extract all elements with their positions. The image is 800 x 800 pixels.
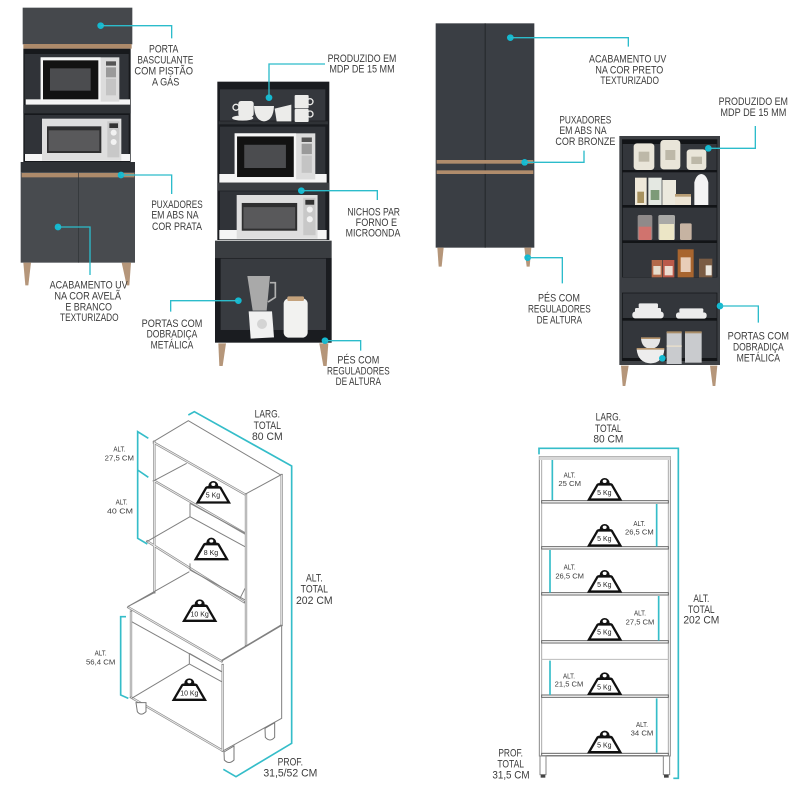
open shelving structure (619, 136, 720, 365)
legs (437, 248, 531, 267)
label: largura: TOTAL (254, 420, 281, 432)
label: alt 40: 40 CM (107, 506, 133, 515)
label: alt 27,5: ALT. (113, 445, 125, 454)
label: alt 21,5: ALT. (563, 671, 575, 680)
feet (540, 756, 670, 778)
callout: MDP: MDP DE 15 MM (720, 107, 786, 119)
callout: portas: PORTAS COM (728, 330, 789, 342)
microwave silver door (237, 195, 318, 239)
microwave black door (41, 57, 119, 102)
bronze handle strip top (23, 44, 132, 49)
weight shelf 6 (587, 731, 622, 753)
teal dimension lines (121, 412, 292, 777)
callout: portas: DOBRADIÇA (147, 329, 198, 341)
callout: acabamento preto: TEXTURIZADO (600, 75, 659, 87)
legs (218, 343, 328, 366)
label: alt 25: 25 CM (558, 479, 581, 488)
weight shelf 5: 5 Kg (597, 685, 612, 692)
panel: front dimension drawing (492, 412, 719, 781)
callout: acabamento avelã (50, 224, 128, 324)
label: alt 56,4 (86, 649, 115, 667)
callout: acabamento preto: NA COR PRETO (595, 64, 663, 76)
label: altura total: 202 CM (296, 595, 333, 607)
callout: acabamento avelã: NA COR AVELÃ (54, 289, 122, 302)
label: alt 25 (558, 470, 581, 488)
label: largura (593, 412, 623, 446)
label: profundidade: 31,5/52 CM (263, 767, 317, 779)
callout: puxadores bronze: COR BRONZE (555, 136, 615, 148)
legs (621, 366, 717, 386)
callout: nichos: FORNO E (356, 217, 397, 229)
callout: porta basculante (97, 22, 193, 89)
furniture feet (136, 703, 275, 762)
label: altura total: ALT. (306, 572, 323, 584)
callout: portas: PORTAS COM (142, 318, 202, 330)
label: alt 26,5 left: ALT. (564, 563, 576, 572)
microwave silver door (42, 119, 121, 161)
label: profundidade (263, 756, 317, 779)
callout: puxadores prata (118, 172, 203, 233)
label: alt 40: ALT. (116, 498, 128, 507)
legs (23, 263, 131, 285)
bowls and containers (637, 331, 702, 364)
callout: puxadores bronze: PUXADORES (559, 114, 611, 126)
label: profundidade: 31,5 CM (492, 769, 530, 781)
callout: MDP: MDP DE 15 MM (329, 64, 395, 76)
lower body (215, 241, 332, 343)
label: alt 34 (631, 720, 653, 737)
weight 8 Kg: 8 Kg (204, 550, 218, 557)
label: altura total: 202 CM (683, 615, 719, 627)
weight 8 Kg (194, 538, 229, 560)
label: alt 21,5: 21,5 CM (555, 680, 583, 689)
label: altura total (683, 593, 719, 627)
weight 10 Kg upper: 10 Kg (191, 611, 209, 618)
label: profundidade: PROF. (498, 748, 523, 760)
callout: pés (322, 337, 390, 388)
callout: pés: PÉS COM (337, 354, 379, 367)
callout: puxadores prata: EM ABS NA (151, 210, 199, 222)
callout: pés: REGULADORES (528, 303, 591, 315)
label: alt 26,5 right: ALT. (633, 519, 645, 528)
boxes and bottle (635, 174, 708, 205)
callout: MDP: PRODUZIDO EM (719, 96, 788, 108)
label: altura total (296, 572, 333, 607)
plates (632, 303, 707, 319)
label: altura total: TOTAL (688, 604, 715, 616)
label: alt 40 (107, 498, 133, 515)
callout: acabamento preto (507, 34, 667, 87)
blender (247, 276, 275, 339)
label: alt 34: ALT. (636, 720, 648, 729)
weight 5 Kg: 5 Kg (206, 493, 220, 500)
panel: open cabinet with appliances (142, 53, 401, 388)
callout: portas (717, 303, 789, 364)
upper door (23, 8, 132, 44)
label: alt 56,4: ALT. (95, 649, 107, 658)
label: alt 21,5 (555, 671, 583, 689)
callout: pés: REGULADORES (327, 365, 390, 377)
callout: puxadores prata: COR PRATA (152, 221, 203, 233)
callout: MDP (705, 96, 788, 152)
weight 10 Kg upper (182, 599, 217, 622)
bronze handles (437, 160, 533, 174)
shelving line drawing (539, 457, 670, 756)
callout: puxadores bronze (521, 114, 615, 166)
marker dot (659, 355, 666, 362)
callout: pés (524, 254, 591, 326)
label: alt 26,5 left: 26,5 CM (555, 571, 584, 580)
label: largura: LARG. (255, 409, 280, 421)
furniture line drawing (128, 421, 282, 751)
callout: puxadores bronze: EM ABS NA (559, 125, 607, 137)
callout: porta basculante: A GÁS (152, 76, 179, 89)
label: alt 56,4: 56,4 CM (86, 658, 115, 667)
callout: pés: DE ALTURA (537, 314, 583, 326)
doors (436, 23, 534, 248)
label: alt 27,5: ALT. (634, 609, 646, 618)
label: alt 26,5 left (555, 563, 584, 580)
label: largura: 80 CM (593, 434, 623, 446)
callout: portas: DOBRADIÇA (733, 341, 784, 353)
label: altura total: ALT. (693, 593, 709, 605)
label: largura: LARG. (596, 412, 621, 424)
weight shelf 4 (587, 618, 622, 641)
glass jars (638, 215, 692, 240)
callout: MDP (266, 53, 396, 101)
callout: puxadores prata: PUXADORES (151, 199, 203, 211)
panel: cabinet with tilting door (21, 8, 203, 324)
label: alt 34: 34 CM (631, 728, 653, 737)
callout: porta basculante: COM PISTÃO (134, 64, 193, 77)
label: alt 25: ALT. (564, 470, 576, 479)
label: alt 27,5 (626, 609, 654, 626)
label: largura: TOTAL (595, 423, 622, 435)
callout: porta basculante: BASCULANTE (137, 54, 193, 66)
callout: acabamento avelã: E BRANCO (65, 301, 112, 313)
callout: pés: DE ALTURA (336, 376, 382, 388)
weight shelf 2 (587, 524, 622, 547)
label: alt 27,5: 27,5 CM (105, 453, 134, 462)
callout: pés: PÉS COM (538, 292, 580, 305)
label: altura total: TOTAL (301, 584, 328, 596)
callout: acabamento avelã: ACABAMENTO UV (50, 280, 128, 292)
weight shelf 3 (587, 570, 622, 593)
callout: nichos: MICROONDA (346, 228, 401, 240)
label: alt 27,5 (105, 445, 134, 462)
callout: MDP: PRODUZIDO EM (328, 53, 396, 65)
callout: nichos (298, 187, 401, 240)
weight shelf 6: 5 Kg (597, 743, 612, 750)
weight 10 Kg lower: 10 Kg (180, 691, 199, 698)
callout: porta basculante: PORTA (149, 44, 179, 56)
panel: isometric dimension drawing (86, 409, 333, 779)
jar (284, 296, 308, 338)
weight shelf 3: 5 Kg (597, 582, 612, 589)
weight shelf 4: 5 Kg (597, 630, 612, 637)
label: profundidade: TOTAL (497, 759, 524, 771)
panel: closed tall cabinet (436, 23, 789, 386)
cups and bowls (232, 95, 313, 122)
label: alt 27,5: 27,5 CM (626, 617, 654, 626)
teal dimension lines (539, 448, 678, 778)
callout: portas: METÁLICA (737, 351, 781, 364)
weight shelf 1: 5 Kg (597, 490, 612, 497)
callout: portas (142, 297, 242, 351)
canisters (634, 140, 706, 170)
label: alt 26,5 right (625, 519, 654, 536)
callout: nichos: NICHOS PAR (347, 206, 400, 218)
label: largura (252, 409, 283, 443)
callout: acabamento preto: ACABAMENTO UV (589, 54, 667, 66)
lower body with doors (21, 162, 135, 263)
label: alt 26,5 right: 26,5 CM (625, 527, 654, 536)
upper niches (23, 49, 131, 163)
callout: acabamento avelã: TEXTURIZADO (60, 312, 119, 324)
callout: portas: METÁLICA (151, 338, 194, 351)
upper structure (217, 82, 329, 240)
weight 5 Kg (196, 481, 231, 504)
microwave black door (235, 133, 315, 179)
label: profundidade: PROF. (278, 756, 303, 768)
label: largura: 80 CM (252, 431, 283, 443)
spice jars (652, 249, 712, 277)
weight shelf 5 (587, 672, 622, 695)
label: profundidade (492, 748, 530, 781)
weight 10 Kg lower (172, 678, 207, 701)
weight shelf 2: 5 Kg (597, 536, 612, 543)
weight shelf 1 (587, 478, 622, 501)
